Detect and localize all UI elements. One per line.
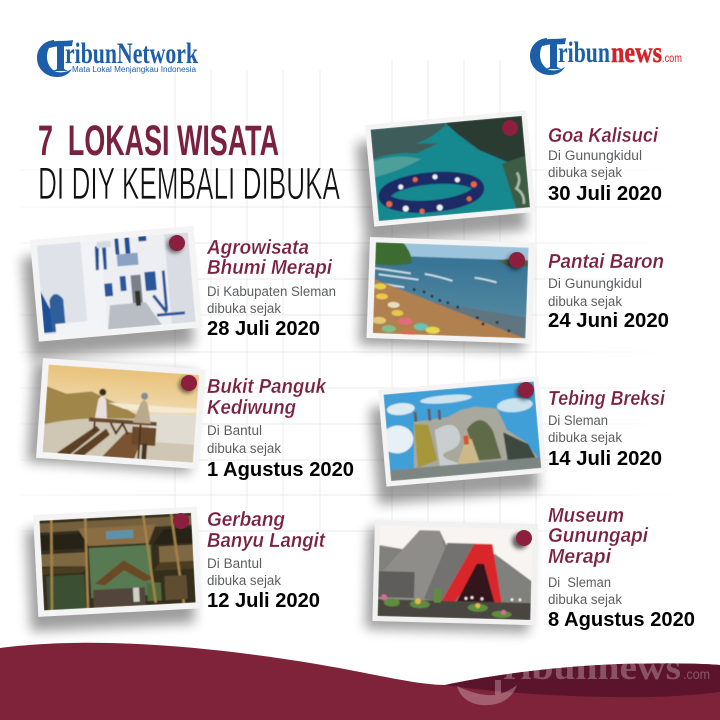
text: Museum Gunungapi Merapi: dibuka sejak bbox=[548, 592, 622, 607]
photo card: Tebing Breksi bbox=[370, 376, 547, 504]
text: Museum Gunungapi Merapi: 8 Agustus 2020 bbox=[548, 609, 695, 631]
text: Bukit Panguk Kediwung bbox=[207, 376, 354, 481]
bottom maroon wave bbox=[0, 643, 720, 720]
logo: Tribunnews.com: ribun bbox=[558, 36, 610, 69]
text: Gerbang Banyu Langit bbox=[207, 509, 326, 612]
text: Gerbang Banyu Langit: Banyu Langit bbox=[207, 530, 326, 552]
text: Museum Gunungapi Merapi: Museum bbox=[548, 505, 624, 527]
text: Pantai Baron: dibuka sejak bbox=[548, 294, 622, 309]
title: 7 LOKASI WISATA bbox=[38, 117, 279, 165]
text: Goa Kalisuci: Goa Kalisuci bbox=[548, 125, 658, 147]
text: Goa Kalisuci: dibuka sejak bbox=[548, 165, 622, 180]
text: Museum Gunungapi Merapi: Merapi bbox=[548, 546, 611, 568]
text: Goa Kalisuci bbox=[548, 125, 662, 205]
text: Gerbang Banyu Langit: 12 Juli 2020 bbox=[207, 590, 320, 612]
text: Tebing Breksi: Di Sleman bbox=[548, 413, 608, 428]
logo: Tribun Network: Mata Lokal Menjangkau Indonesia bbox=[72, 65, 197, 74]
logo: Tribun Network: ribunNetwork bbox=[65, 37, 198, 70]
text: Tebing Breksi bbox=[548, 388, 665, 470]
text: Bukit Panguk Kediwung: Kediwung bbox=[207, 397, 296, 419]
text: Agrowisata Bhumi Merapi: Di Kabupaten Sleman bbox=[207, 284, 336, 299]
text: Bukit Panguk Kediwung: 1 Agustus 2020 bbox=[207, 459, 354, 481]
text: Agrowisata Bhumi Merapi: 28 Juli 2020 bbox=[207, 318, 320, 340]
text: Pantai Baron bbox=[548, 251, 669, 332]
text: Goa Kalisuci: 30 Juli 2020 bbox=[548, 183, 662, 205]
photo card: Gerbang Banyu Langit bbox=[26, 506, 202, 631]
watermark: tribunnews.com: .com bbox=[683, 666, 710, 682]
text: Agrowisata Bhumi Merapi: Bhumi Merapi bbox=[207, 257, 332, 279]
text: Pantai Baron: Pantai Baron bbox=[548, 251, 664, 273]
text: Bukit Panguk Kediwung: Di Bantul bbox=[207, 423, 262, 438]
text: Pantai Baron: 24 Juni 2020 bbox=[548, 310, 669, 332]
text: Bukit Panguk Kediwung: Bukit Panguk bbox=[207, 376, 327, 398]
logo: Tribunnews.com: .com bbox=[662, 51, 682, 65]
photo card: Agrowisata Bhumi Merapi bbox=[22, 226, 202, 359]
logo: Tribunnews.com: news bbox=[611, 36, 662, 69]
text: Museum Gunungapi Merapi bbox=[548, 505, 695, 631]
text: Bukit Panguk Kediwung: dibuka sejak bbox=[207, 441, 281, 456]
logo: Tribunnews.com bbox=[530, 36, 682, 75]
logo: Tribun Network bbox=[37, 37, 198, 77]
text: Tebing Breksi: Tebing Breksi bbox=[548, 388, 665, 410]
watermark: tribunnews.com: ribunnews bbox=[503, 647, 681, 687]
text: Agrowisata Bhumi Merapi: dibuka sejak bbox=[207, 301, 281, 316]
photo card: Museum Gunungapi Merapi bbox=[366, 520, 538, 633]
text: Museum Gunungapi Merapi: Di Sleman bbox=[548, 575, 611, 590]
title bbox=[38, 117, 340, 209]
text: Tebing Breksi: dibuka sejak bbox=[548, 430, 622, 445]
text: Gerbang Banyu Langit: Di Bantul bbox=[207, 556, 262, 571]
text: Pantai Baron: Di Gunungkidul bbox=[548, 276, 642, 291]
title: DI DIY KEMBALI DIBUKA bbox=[38, 158, 340, 209]
text: Gerbang Banyu Langit: Gerbang bbox=[207, 509, 285, 531]
watermark: tribunnews.com bbox=[457, 647, 710, 705]
photo card: Pantai Baron bbox=[359, 237, 535, 351]
text: Gerbang Banyu Langit: dibuka sejak bbox=[207, 573, 281, 588]
text: Museum Gunungapi Merapi: Gunungapi bbox=[548, 525, 648, 547]
text: Agrowisata Bhumi Merapi bbox=[206, 237, 336, 340]
photo card: Goa Kalisuci bbox=[356, 110, 536, 244]
photo card: Bukit Panguk Kediwung bbox=[27, 358, 206, 473]
text: Agrowisata Bhumi Merapi: Agrowisata bbox=[206, 237, 309, 259]
text: Tebing Breksi: 14 Juli 2020 bbox=[548, 448, 662, 470]
text: Goa Kalisuci: Di Gunungkidul bbox=[548, 148, 642, 163]
